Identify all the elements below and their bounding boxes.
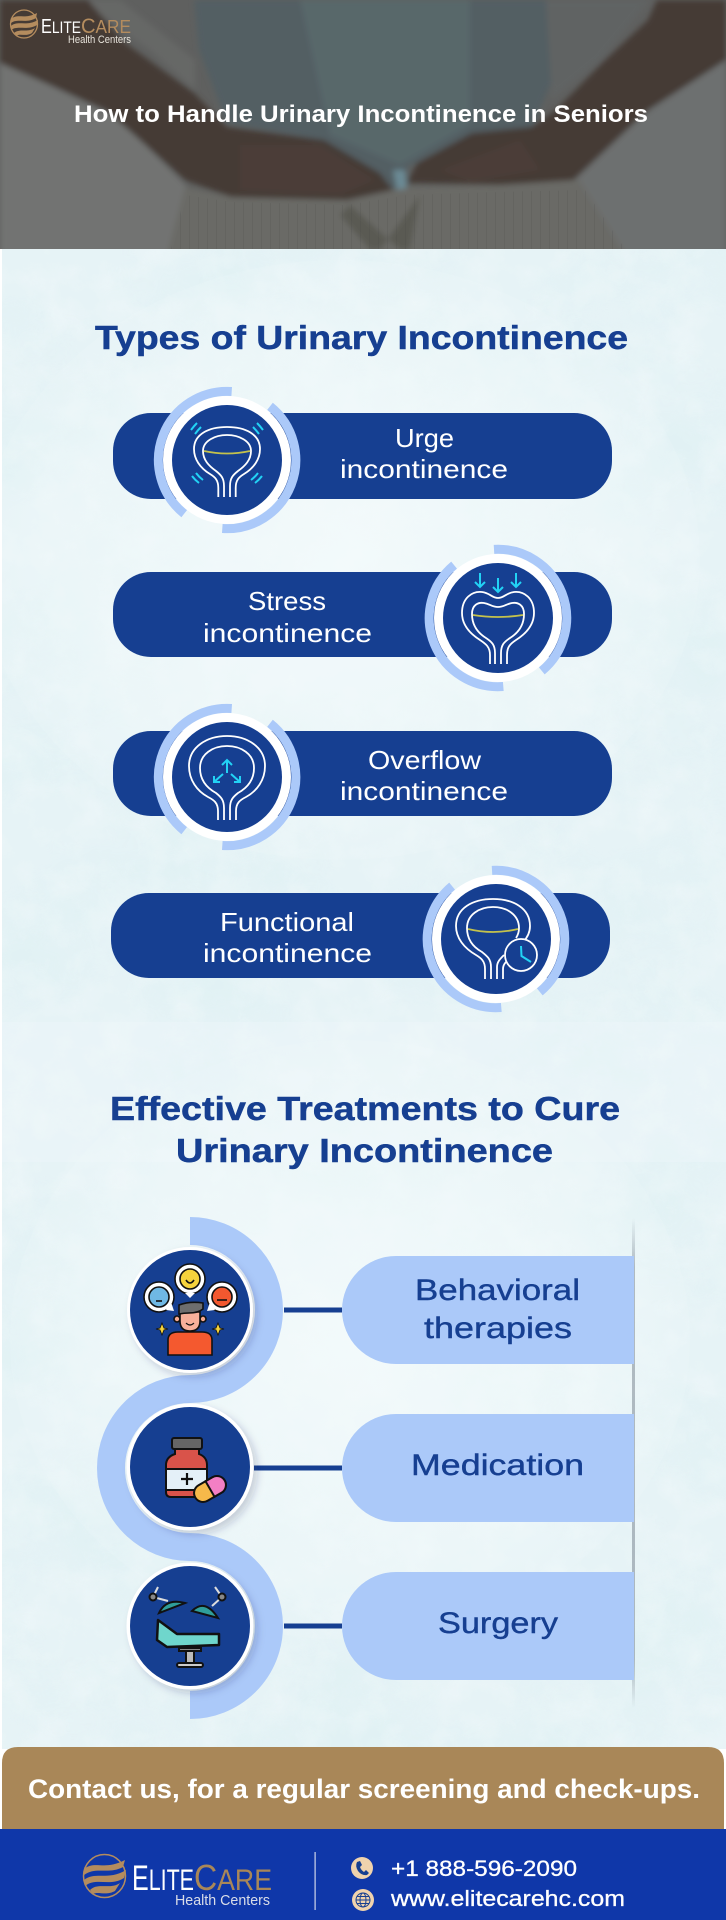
behavioral pill: Behavioral <box>415 1274 580 1307</box>
overflow icon <box>158 708 296 846</box>
urge label: Urge <box>395 423 454 453</box>
functional label: Functional <box>220 907 354 937</box>
type card: functional incontinence <box>111 870 610 1008</box>
footer logo: CARE <box>194 1857 272 1898</box>
treatment: behavioral therapies <box>127 1247 634 1373</box>
urge label: incontinence <box>340 454 508 484</box>
icon: medicine bottle and capsule <box>126 1404 254 1530</box>
stress icon <box>429 549 567 687</box>
call to action banner <box>2 1747 724 1829</box>
urge label <box>340 423 508 484</box>
header title: How to Handle Urinary Incontinence in Seniors <box>74 101 648 128</box>
right edge panel shadow <box>632 1218 635 1708</box>
connector line <box>284 1624 342 1628</box>
medication pill: Medication <box>411 1449 584 1482</box>
medication pill <box>342 1414 634 1522</box>
treatment: surgery <box>126 1562 634 1690</box>
connector line <box>284 1308 342 1312</box>
overflow label <box>340 745 508 806</box>
section heading: treatments: Urinary Incontinence <box>176 1132 553 1169</box>
treatments timeline ribbon <box>111 1231 269 1705</box>
stress label <box>203 586 372 648</box>
footer logo <box>84 1854 272 1909</box>
overflow label: Overflow <box>368 745 481 775</box>
behavioral pill: therapies <box>424 1312 572 1345</box>
header logo: ELITE <box>41 16 81 38</box>
behavioral pill <box>342 1256 634 1364</box>
type card: urge incontinence <box>113 391 612 529</box>
urge icon <box>158 391 296 529</box>
website contact: www.elitecarehc.com <box>390 1886 625 1911</box>
icon: person with emotions <box>127 1247 253 1373</box>
connector line <box>254 1466 342 1470</box>
header photo panel <box>0 0 726 262</box>
treatment: medication <box>126 1404 634 1530</box>
icon: operating table and lamps <box>126 1562 254 1690</box>
surgery pill <box>342 1572 634 1680</box>
header logo: CARE <box>81 15 131 38</box>
phone contact: +1 888-596-2090 <box>391 1856 577 1881</box>
footer bar <box>0 1829 726 1920</box>
call to action banner: Contact us, for a regular screening and check-ups. <box>28 1774 700 1804</box>
stress label: incontinence <box>203 618 372 648</box>
header logo: Health Centers <box>68 34 131 46</box>
section heading: treatments <box>110 1090 620 1169</box>
functional icon <box>427 870 565 1008</box>
footer logo: Health Centers <box>175 1892 270 1909</box>
functional label: incontinence <box>203 938 372 968</box>
type card: overflow incontinence <box>113 708 612 846</box>
footer logo: ELITE <box>132 1859 194 1898</box>
surgery pill: Surgery <box>438 1607 558 1640</box>
section heading: treatments: Effective Treatments to Cure <box>110 1090 620 1127</box>
section heading: types: Types of Urinary Incontinence <box>95 319 628 356</box>
functional label <box>203 907 372 968</box>
stress label: Stress <box>248 586 326 616</box>
type card: stress incontinence <box>113 549 612 687</box>
page background texture <box>0 249 726 1749</box>
header logo <box>10 10 131 46</box>
overflow label: incontinence <box>340 776 508 806</box>
